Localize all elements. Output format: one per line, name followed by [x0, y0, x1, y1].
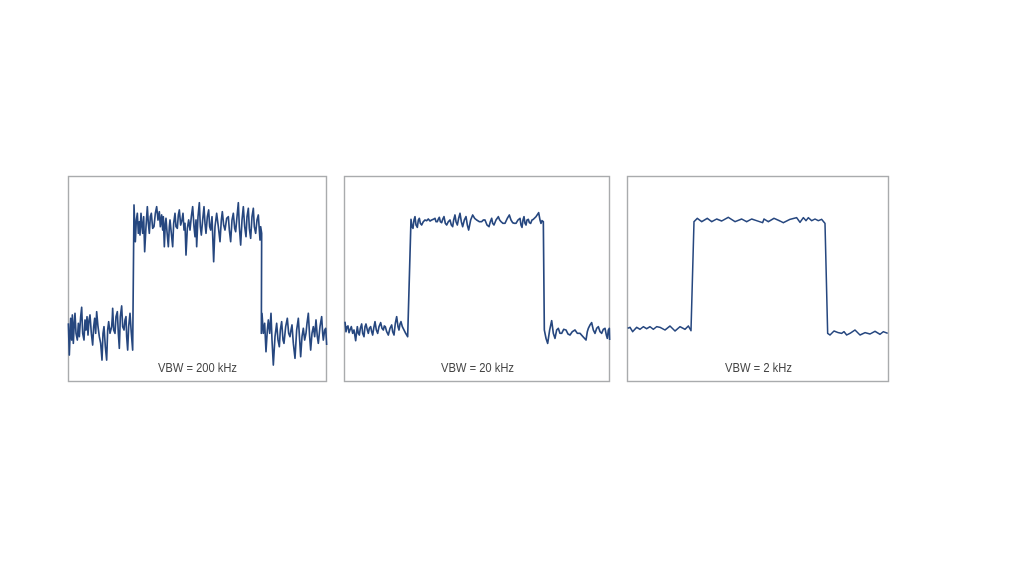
trace: signal at VBW 2 kHz: [628, 217, 888, 335]
label: VBW = 20 kHz: VBW = 20 kHz: [441, 361, 514, 375]
trace: noisy signal at VBW 200 kHz: [68, 203, 327, 365]
panel: VBW 2 kHz: [628, 176, 888, 382]
label: VBW = 2 kHz: VBW = 2 kHz: [725, 361, 792, 375]
label: VBW = 200 kHz: VBW = 200 kHz: [158, 361, 237, 375]
trace: signal at VBW 20 kHz: [345, 213, 610, 343]
panel: VBW 200 kHz: [68, 176, 327, 382]
panel: VBW 20 kHz: [344, 176, 610, 382]
